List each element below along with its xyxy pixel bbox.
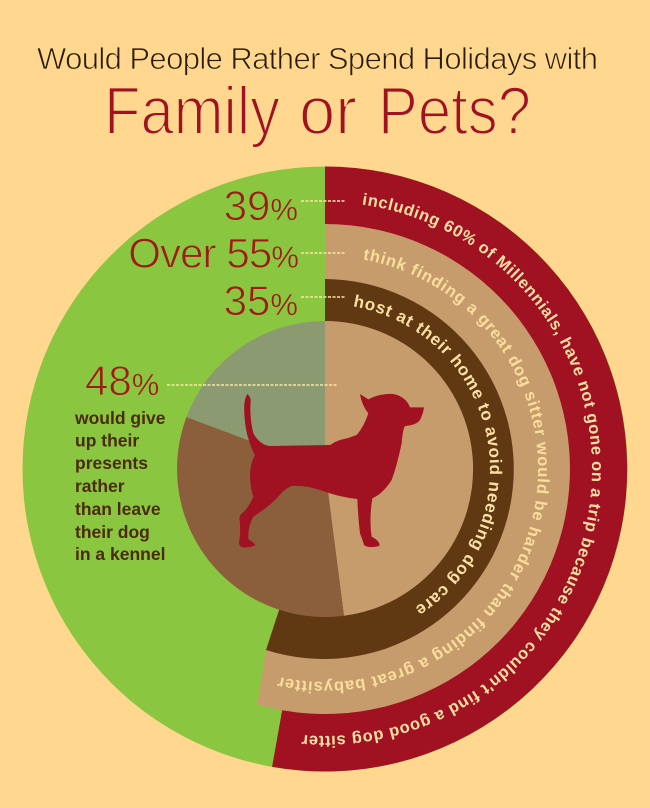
curved text: tan ring: think finding a great dog sitter would be harder than finding a great babysitter — [277, 249, 550, 694]
text: presents caption: their dog — [75, 522, 150, 542]
stat: over 55%: Over 55% — [128, 230, 298, 276]
icon: dog silhouette — [239, 394, 424, 547]
title: Pets? — [378, 73, 531, 149]
ring: red 39% — [272, 166, 627, 771]
curved text: red ring: including 60% of Millennials, have not gone on a trip because they couldn't find a good dog sitter — [302, 192, 601, 748]
title: Would People Rather Spend Holidays with — [37, 41, 598, 76]
inner: mid-brown sector — [177, 417, 344, 617]
text: presents caption: than leave — [75, 499, 161, 519]
green disc — [22, 166, 628, 772]
stat: 35%: 35% — [224, 277, 298, 324]
text: presents caption: up their — [75, 430, 139, 450]
title: Family — [104, 73, 280, 149]
inner: tan sector — [325, 321, 473, 616]
radial chart — [22, 166, 628, 772]
text: presents caption: rather — [75, 476, 125, 496]
ring: brown 35% — [266, 279, 514, 659]
stat: 35% — [224, 277, 345, 324]
title: or — [299, 73, 357, 149]
text: presents caption: presents — [75, 453, 148, 473]
text: presents caption: would give — [74, 408, 166, 428]
title — [37, 41, 598, 149]
curved text: brown ring: host at their home to avoid needing dog care — [354, 294, 502, 614]
stat: 39% — [224, 182, 345, 229]
ring: tan 55% — [257, 224, 570, 714]
stat: 39%: 39% — [224, 182, 298, 229]
text: presents caption: in a kennel — [75, 544, 165, 564]
stat: 48%: 48% — [85, 357, 159, 404]
inner: grey-green sector — [186, 321, 325, 469]
